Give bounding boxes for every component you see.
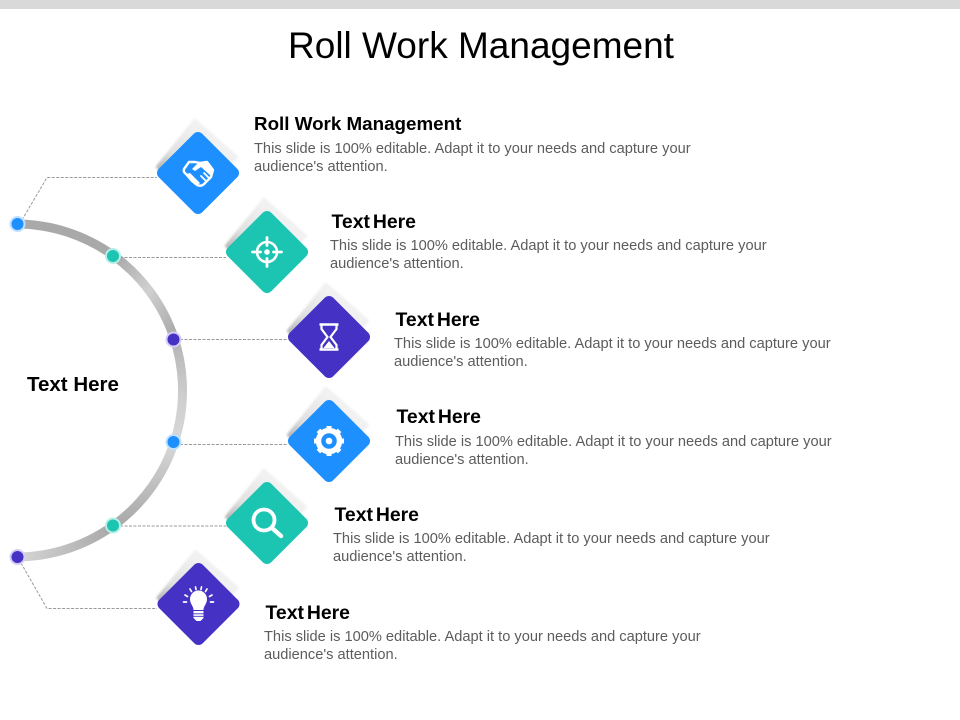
item 3 text: This slide is 100% editable. Adapt it to your needs and capture your (394, 336, 831, 352)
item 6 text: Text Here (266, 602, 350, 624)
item 6 text: This slide is 100% editable. Adapt it to your needs and capture your (264, 629, 701, 645)
item 4 text: This slide is 100% editable. Adapt it to your needs and capture your (395, 434, 832, 450)
icon tile 3: hourglass (286, 285, 372, 380)
item 2 text (330, 211, 767, 272)
item 5 text (333, 504, 770, 565)
top bar (0, 0, 960, 9)
item 3 text: audience's attention. (394, 354, 528, 370)
icon tile 1: handshake (155, 121, 241, 216)
item 6 text (264, 602, 701, 663)
left label: Text Here (27, 373, 119, 396)
connector lines (21, 178, 288, 608)
item 3 text (394, 309, 831, 370)
item 5 text: Text Here (334, 504, 419, 526)
item 2 text: This slide is 100% editable. Adapt it to your needs and capture your (330, 238, 767, 254)
item 5 text: This slide is 100% editable. Adapt it to your needs and capture your (333, 531, 770, 547)
item 2 text: Text Here (332, 211, 416, 233)
item 1 text (254, 113, 691, 175)
item 3 text: Text Here (396, 309, 480, 331)
icon tile 2: target (224, 200, 310, 295)
icon tile 5: magnifier (224, 471, 310, 566)
item 1 text: audience's attention. (254, 159, 388, 175)
arc: central semicircle (17, 224, 183, 557)
item 4 text (395, 406, 832, 468)
item 5 text: audience's attention. (333, 549, 467, 565)
item 4 text: Text Here (396, 406, 481, 428)
item 1 text: This slide is 100% editable. Adapt it to your needs and capture your (254, 141, 691, 157)
title: Roll Work Management (288, 25, 674, 66)
item 2 text: audience's attention. (330, 256, 464, 272)
arc nodes (10, 217, 180, 564)
item 4 text: audience's attention. (395, 452, 529, 468)
icon tile 4: gear (286, 389, 372, 484)
item 6 text: audience's attention. (264, 647, 398, 663)
icon tile 6: light bulb (155, 552, 242, 647)
item 1 text: Roll Work Management (254, 113, 461, 134)
